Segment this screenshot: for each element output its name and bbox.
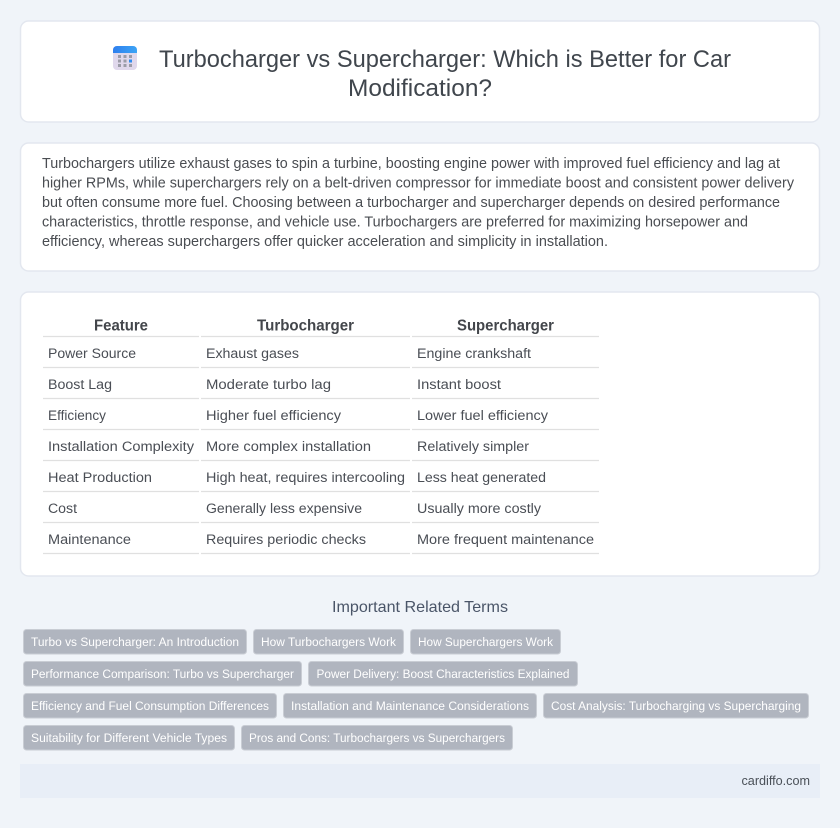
footer <box>20 764 820 798</box>
row: installation complexity: More complex installation <box>206 439 371 455</box>
tag: Installation and Maintenance Considerations <box>291 699 529 713</box>
row: cost: Cost <box>48 501 77 517</box>
tag <box>308 662 578 686</box>
row: boost lag: Instant boost <box>417 377 501 393</box>
row: installation complexity: Installation Complexity <box>48 439 195 455</box>
row: maintenance: Requires periodic checks <box>206 532 366 548</box>
row: cost: Usually more costly <box>417 501 542 517</box>
summary text block: but often consume more fuel. Choosing between a turbocharger and supercharger depends on desired performance <box>42 195 780 211</box>
row: power source <box>48 346 531 362</box>
title: Modification? <box>348 75 492 102</box>
icon: calendar <box>113 46 137 70</box>
row: efficiency <box>48 408 549 424</box>
tag <box>544 694 808 718</box>
row: heat production: Less heat generated <box>417 470 546 486</box>
tag: Cost Analysis: Turbocharging vs Supercharging <box>551 699 801 713</box>
title <box>159 46 731 102</box>
row: installation complexity: Relatively simpler <box>417 439 529 455</box>
row: boost lag: Moderate turbo lag <box>206 377 331 393</box>
tag <box>24 662 302 686</box>
tag <box>24 726 234 750</box>
row: maintenance <box>48 532 594 548</box>
tag: Efficiency and Fuel Consumption Differences <box>31 699 269 713</box>
row: maintenance: More frequent maintenance <box>417 532 594 548</box>
summary text block: higher RPMs, while superchargers rely on a belt-driven compressor for immediate boost and consistent power delivery <box>42 176 795 192</box>
tag: How Superchargers Work <box>418 635 554 649</box>
table header: Supercharger <box>457 318 554 334</box>
row: heat production: High heat, requires intercooling <box>206 470 405 486</box>
row: efficiency: Lower fuel efficiency <box>417 408 549 424</box>
row: efficiency: Higher fuel efficiency <box>206 408 342 424</box>
tag <box>284 694 536 718</box>
tag <box>24 694 276 718</box>
tag: Suitability for Different Vehicle Types <box>31 731 227 745</box>
tag <box>254 630 404 654</box>
summary text block: efficiency, whereas superchargers offer quicker acceleration and simplicity in installation. <box>42 234 608 250</box>
summary text block <box>42 156 795 250</box>
row: boost lag <box>48 377 501 393</box>
tag: Power Delivery: Boost Characteristics Explained <box>316 667 570 681</box>
summary text block: characteristics, throttle response, and vehicle use. Turbochargers are preferred for maximizing horsepower and <box>42 214 748 230</box>
row: power source: Exhaust gases <box>206 346 299 362</box>
row: heat production: Heat Production <box>48 470 152 486</box>
row: installation complexity <box>48 439 529 455</box>
tag: Turbo vs Supercharger: An Introduction <box>31 635 239 649</box>
row: heat production <box>48 470 546 486</box>
title panel <box>20 21 820 122</box>
table header: Feature <box>94 318 148 334</box>
row: power source: Engine crankshaft <box>417 346 531 362</box>
row: maintenance: Maintenance <box>48 532 131 548</box>
row: cost <box>48 501 542 517</box>
related term tags <box>24 630 808 750</box>
title: Turbocharger vs Supercharger: Which is Better for Car <box>159 46 731 73</box>
row: boost lag: Boost Lag <box>48 377 112 393</box>
table header <box>94 318 554 334</box>
tag: Pros and Cons: Turbochargers vs Superchargers <box>249 731 505 745</box>
tag <box>242 726 512 750</box>
tag <box>24 630 246 654</box>
table header: Turbocharger <box>257 318 354 334</box>
panel: summary <box>20 143 820 271</box>
summary text block: Turbochargers utilize exhaust gases to spin a turbine, boosting engine power with improved fuel efficiency and lag at <box>42 156 780 172</box>
heading: related terms: Important Related Terms <box>332 599 508 616</box>
tag <box>410 630 560 654</box>
panel: comparison table <box>20 292 820 576</box>
row: efficiency: Efficiency <box>48 408 107 424</box>
tag: How Turbochargers Work <box>261 635 397 649</box>
footer: cardiffo.com <box>742 773 810 788</box>
row: power source: Power Source <box>48 346 136 362</box>
row: cost: Generally less expensive <box>206 501 362 517</box>
tag: Performance Comparison: Turbo vs Supercharger <box>31 667 294 681</box>
